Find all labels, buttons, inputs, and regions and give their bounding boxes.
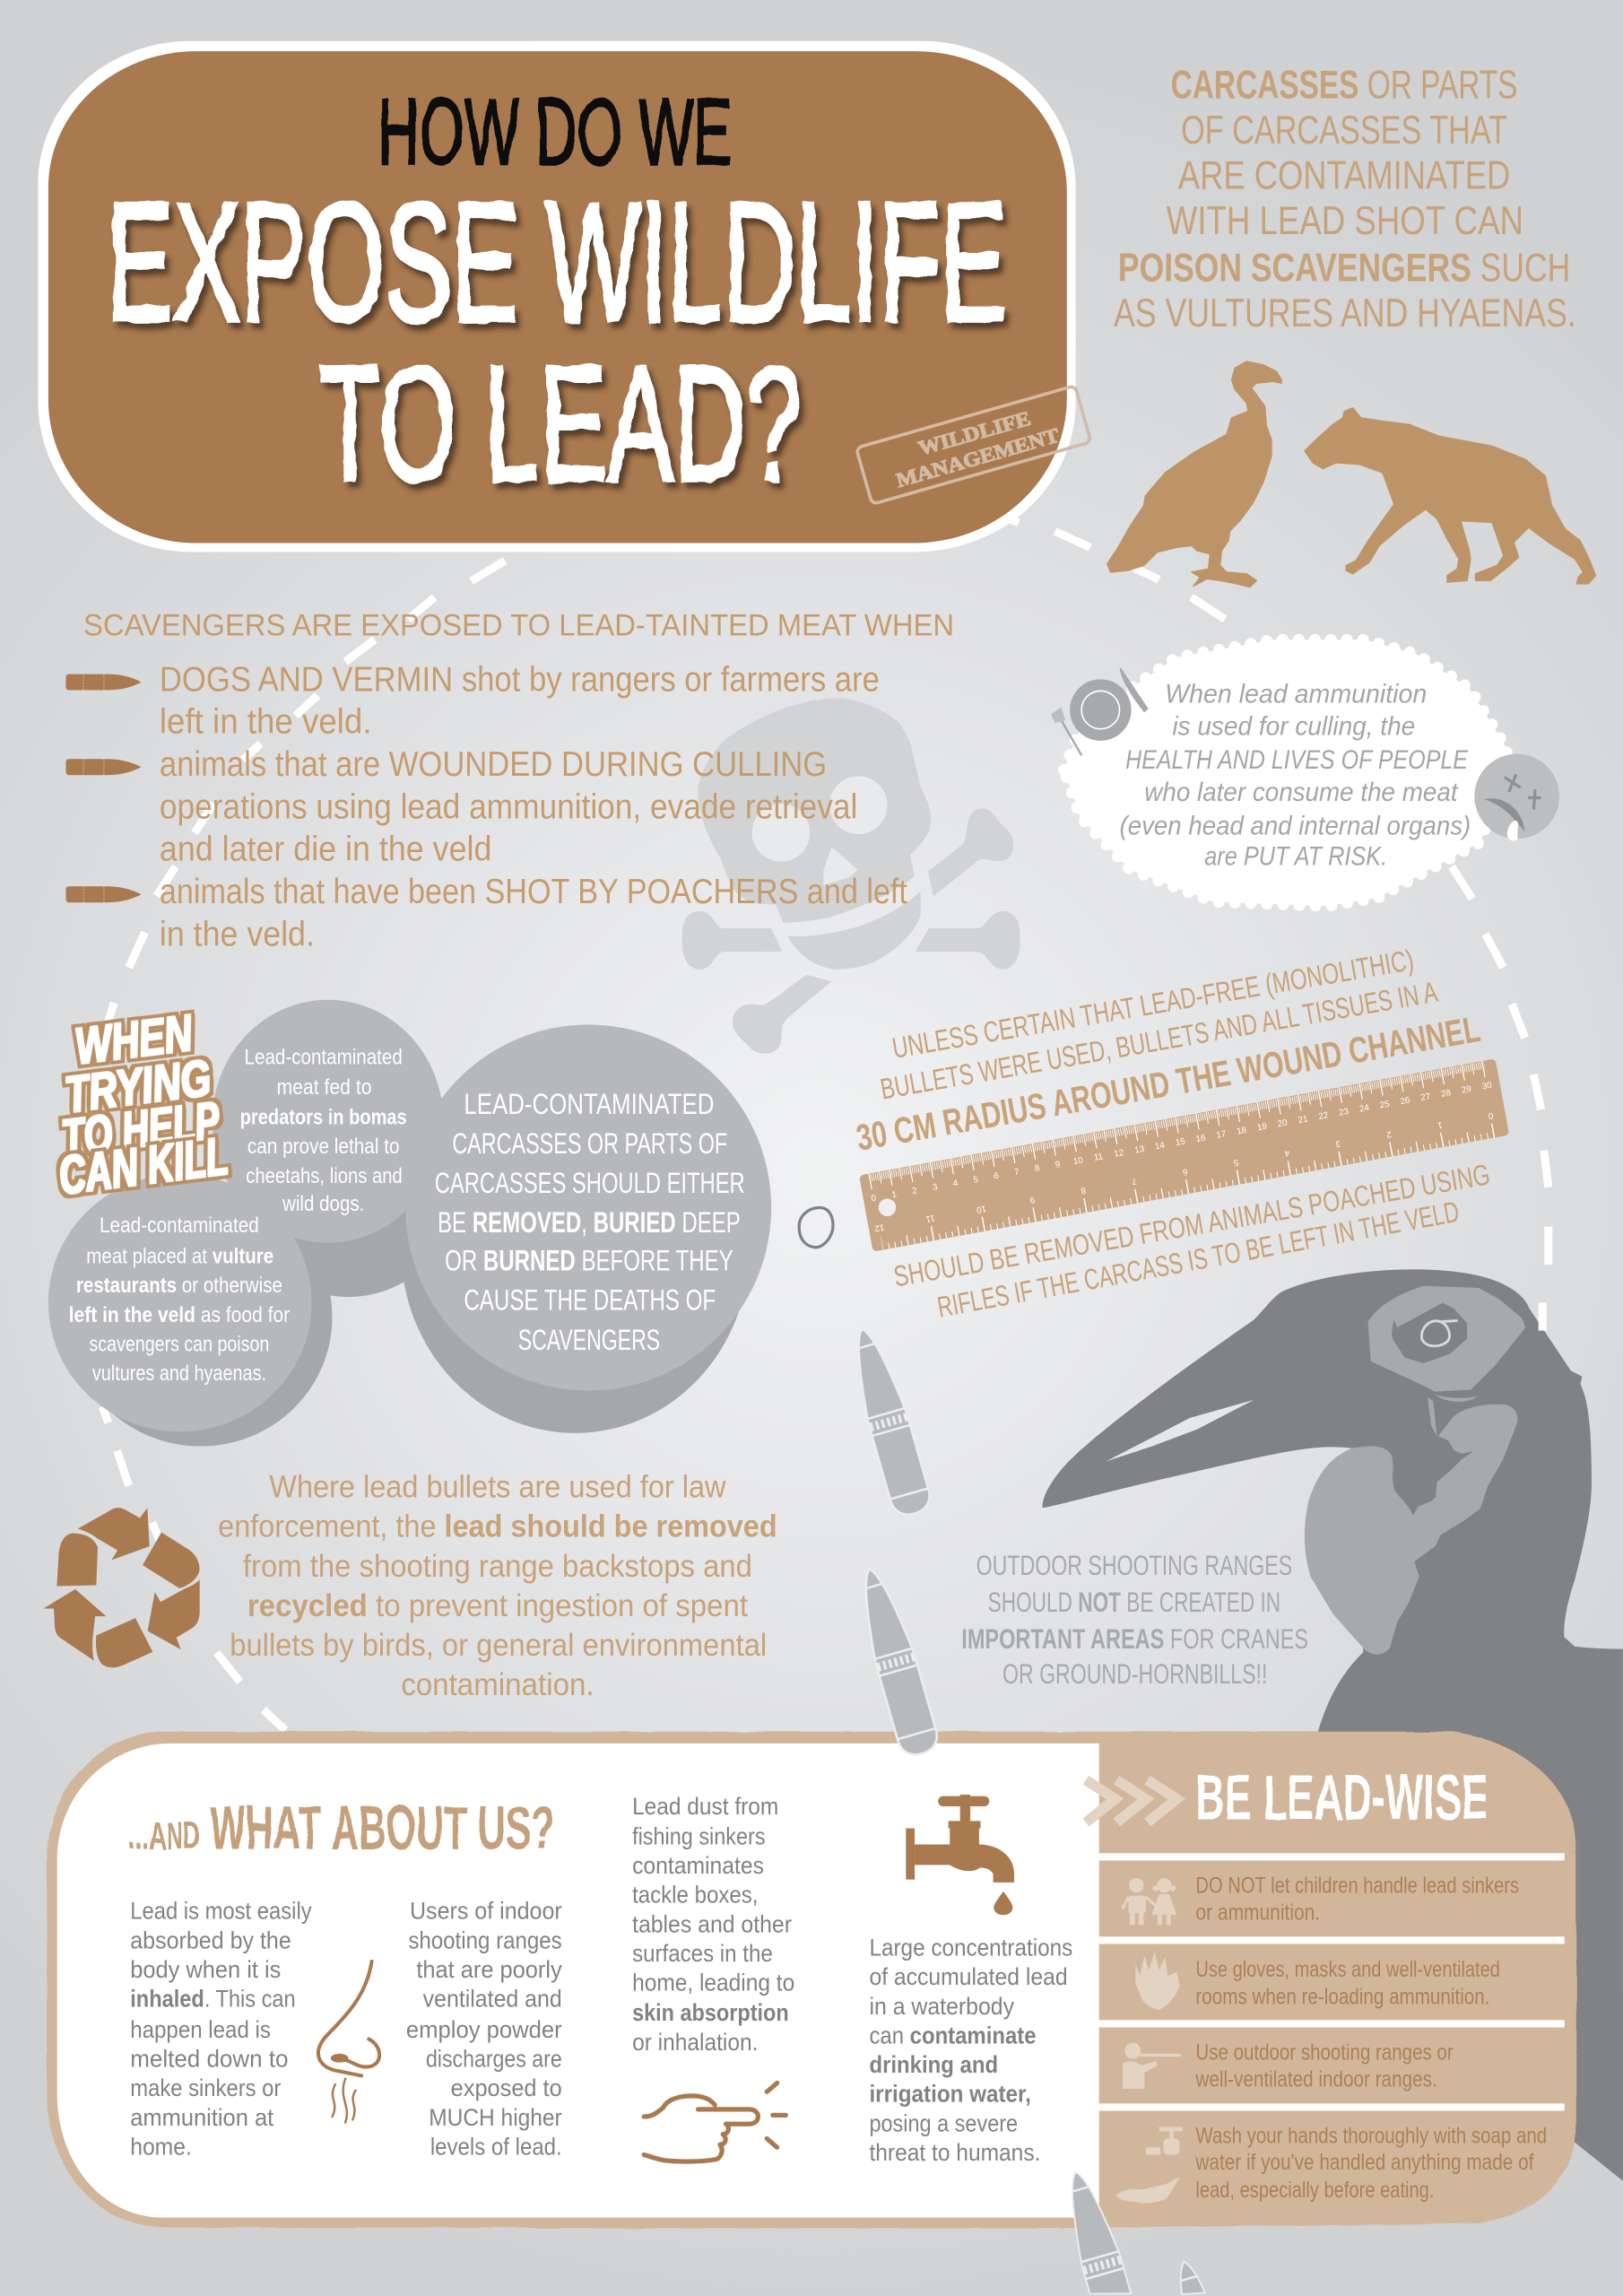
ruler: 12 — [873, 1222, 885, 1233]
ruler: 27 — [1420, 1091, 1431, 1103]
text: carcasses: WITH LEAD SHOT CAN — [1167, 199, 1523, 243]
ruler: 9 — [1028, 1195, 1036, 1205]
icon: bullet 3 — [1056, 2167, 1131, 2296]
heading: expose wildlife: EXPOSE WILDLIFE — [107, 168, 1007, 357]
ruler: 0 — [1487, 1110, 1494, 1121]
ruler: 7 — [1013, 1167, 1020, 1178]
text: lead dust column: contaminates — [632, 1852, 764, 1879]
ruler: 12 — [1114, 1148, 1124, 1160]
icon: small ring — [799, 1208, 833, 1248]
circles: when trying to help — [48, 1000, 771, 1447]
callout: health cloud — [1051, 639, 1559, 906]
text: lead dust column: surfaces in the — [632, 1940, 773, 1967]
ruler: 4 — [952, 1178, 959, 1189]
tip list text: Wash your hands thoroughly with soap and — [1195, 2123, 1547, 2148]
text: indoor ranges column: shooting ranges — [408, 1926, 562, 1953]
tip list text — [1195, 1873, 1547, 2203]
icon: shooter — [1123, 2043, 1181, 2089]
text: health warning: is used for culling, the — [1172, 711, 1415, 741]
ruler: 6 — [1181, 1166, 1188, 1177]
stamp: wildlife management: MANAGEMENT — [894, 424, 1062, 491]
bullet list: operations using lead ammunition, evade retrieval — [160, 787, 857, 826]
ruler: 2 — [1385, 1129, 1393, 1139]
ruler: 14 — [1154, 1141, 1166, 1152]
ruler: 1 — [1436, 1119, 1443, 1130]
heading: when trying to help can kill: TO HELP — [58, 1091, 223, 1168]
text: bomas circle: can prove lethal to — [247, 1135, 400, 1159]
heading: and what about us — [129, 1793, 555, 1862]
stamp: wildlife management — [856, 386, 1091, 504]
text: carcasses: ARE CONTAMINATED — [1178, 154, 1510, 198]
text: carcasses: CARCASSES OR PARTS — [1171, 63, 1517, 107]
ruler: 13 — [1133, 1144, 1146, 1156]
text: health warning: (even head and internal organs) — [1120, 811, 1471, 840]
bullet list: in the veld. — [160, 915, 315, 953]
ruler: 11 — [1093, 1152, 1104, 1163]
ruler: 9 — [1055, 1160, 1061, 1170]
text: waterbody column: Large concentrations — [869, 1935, 1072, 1961]
heading: when trying to help can kill: TRYING — [62, 1049, 214, 1124]
icon: bullet 1 — [843, 1324, 933, 1519]
text: remove carcasses circle: SCAVENGERS — [518, 1323, 660, 1356]
hornbill illustration — [1043, 1269, 1623, 2181]
text: law enforcement: Where lead bullets are used for law — [269, 1470, 726, 1505]
text: vulture restaurants circle: Lead-contaminated — [100, 1214, 259, 1238]
text: waterbody column: drinking and — [869, 2051, 998, 2078]
text: lead dust column: skin absorption — [632, 1999, 789, 2026]
heading: and what about us: WHAT ABOUT US? — [209, 1793, 555, 1862]
text: inhaled column — [130, 1898, 312, 2160]
icon: hyena — [1305, 408, 1595, 584]
icon: vulture — [1107, 361, 1281, 587]
text: bomas circle — [240, 1047, 407, 1216]
text: law enforcement: from the shooting range backstops and — [243, 1549, 752, 1584]
ruler — [859, 1058, 1509, 1252]
text: bomas circle: wild dogs. — [282, 1193, 364, 1216]
ruler: 0 — [871, 1194, 878, 1204]
text: health warning: HEALTH AND LIVES OF PEOPLE — [1125, 745, 1468, 775]
text: indoor ranges column: Users of indoor — [410, 1898, 562, 1925]
ruler: 24 — [1358, 1103, 1370, 1115]
heading: when trying to help can kill: CAN KILL — [56, 1125, 231, 1206]
text: health warning — [1120, 679, 1471, 872]
text: inhaled column: inhaled. This can — [130, 1986, 296, 2013]
ruler: 11 — [924, 1213, 935, 1224]
ruler: 6 — [994, 1170, 1000, 1181]
text: lead dust column: tackle boxes, — [632, 1882, 758, 1909]
title panel — [38, 41, 1091, 552]
text: carcasses — [1114, 63, 1576, 335]
text: indoor ranges column: ventilated and — [423, 1986, 562, 2013]
ruler: 29 — [1461, 1084, 1472, 1096]
ruler: 19 — [1256, 1122, 1268, 1133]
text: inhaled column: Lead is most easily — [130, 1898, 312, 1925]
ruler: 3 — [932, 1182, 939, 1193]
ruler: 22 — [1318, 1110, 1329, 1122]
text: waterbody column: posing a severe — [869, 2109, 1018, 2136]
text: indoor ranges column: discharges are — [426, 2046, 562, 2073]
ruler: 5 — [973, 1175, 980, 1186]
panel: be lead-wise — [1086, 1762, 1565, 2203]
text: indoor ranges column — [406, 1898, 562, 2160]
ruler: 30 — [1481, 1081, 1493, 1091]
bullet list: animals that have been SHOT BY POACHERS and left — [160, 873, 907, 911]
text: bomas circle: cheetahs, lions and — [246, 1165, 403, 1188]
text: lead dust column: or inhalation. — [632, 2029, 758, 2056]
text: inhaled column: melted down to — [130, 2046, 289, 2073]
text: waterbody column: threat to humans. — [869, 2139, 1040, 2166]
text: inhaled column: make sinkers or — [130, 2074, 281, 2101]
heading: how do we: HOW DO WE — [378, 80, 732, 185]
ruler: 15 — [1175, 1136, 1186, 1148]
icon: dripping tap — [906, 1795, 1014, 1915]
icon: children — [1123, 1878, 1176, 1925]
text: outdoor shooting ranges: SHOULD NOT BE CREATED IN — [988, 1586, 1280, 1618]
text: indoor ranges column: MUCH higher — [429, 2104, 562, 2131]
icon: bullet point 2 — [65, 759, 141, 775]
text: indoor ranges column: that are poorly — [416, 1956, 562, 1983]
ruler: 26 — [1400, 1095, 1411, 1107]
heading: and what about us: ...AND — [129, 1814, 201, 1857]
ruler: 5 — [1232, 1157, 1239, 1168]
tip list text: lead, especially before eating. — [1195, 2178, 1434, 2203]
text: health warning: are PUT AT RISK. — [1204, 842, 1387, 872]
heading: to lead: TO LEAD? — [319, 332, 802, 515]
bullet list — [65, 660, 907, 953]
text: remove carcasses circle: CARCASSES OR PARTS OF — [452, 1126, 727, 1160]
text: vulture restaurants circle — [69, 1214, 290, 1386]
heading: when trying to help can kill: WHEN — [72, 1004, 196, 1075]
ruler: 4 — [1283, 1147, 1290, 1158]
ruler: 23 — [1338, 1107, 1350, 1118]
text: waterbody column: irrigation water, — [869, 2081, 1031, 2108]
text: waterbody column — [869, 1935, 1072, 2166]
text: health warning: When lead ammunition — [1165, 679, 1427, 709]
text: waterbody column: in a waterbody — [869, 1993, 1015, 2020]
ruler: 10 — [1072, 1155, 1084, 1167]
text: lead dust column: fishing sinkers — [632, 1822, 766, 1849]
icon: pointing finger — [644, 2083, 785, 2161]
text: carcasses: POISON SCAVENGERS SUCH — [1118, 246, 1570, 290]
icon: nose — [318, 1961, 379, 2123]
icon: bullet 2 — [850, 1564, 942, 1759]
text: outdoor shooting ranges: OR GROUND-HORNBILLS!! — [1002, 1657, 1267, 1690]
text: vulture restaurants circle: scavengers can poison — [90, 1333, 269, 1356]
icon: bullet 4 — [1174, 2258, 1205, 2296]
tip list text: Use gloves, masks and well-ventilated — [1195, 1957, 1500, 1982]
text: lead dust column: tables and other — [632, 1910, 792, 1937]
text: health warning: who later consume the meat — [1144, 778, 1459, 807]
ruler: 2 — [911, 1186, 918, 1196]
text: law enforcement: bullets by birds, or general environmental — [230, 1628, 767, 1663]
ruler: 28 — [1440, 1088, 1453, 1100]
ruler: 8 — [1034, 1163, 1041, 1174]
bullet list: left in the veld. — [160, 703, 372, 742]
text: remove carcasses circle: BE REMOVED, BURIED DEEP — [438, 1205, 741, 1239]
icon: gloves — [1135, 1952, 1179, 2010]
ruler: 8 — [1080, 1185, 1087, 1196]
icon: bullet point 3 — [65, 886, 141, 902]
text: carcasses: OF CARCASSES THAT — [1181, 109, 1507, 152]
tip list text: or ammunition. — [1195, 1900, 1320, 1926]
bullet list: animals that are WOUNDED DURING CULLING — [160, 745, 827, 784]
ruler: 21 — [1298, 1114, 1308, 1126]
icon: sick face — [1474, 754, 1559, 840]
tip list text: Use outdoor shooting ranges or — [1195, 2039, 1454, 2065]
text: waterbody column: of accumulated lead — [869, 1963, 1068, 1990]
ruler: 17 — [1216, 1129, 1227, 1141]
text: inhaled column: home. — [130, 2133, 192, 2160]
text: remove carcasses circle: CAUSE THE DEATHS OF — [464, 1283, 716, 1317]
text: outdoor shooting ranges — [961, 1549, 1308, 1690]
text: lead dust column: home, leading to — [632, 1970, 794, 1996]
bullet list: DOGS AND VERMIN shot by rangers or farmers are — [160, 660, 880, 699]
text: bomas circle: predators in bomas — [240, 1106, 407, 1129]
heading: when trying to help can kill — [56, 1004, 231, 1206]
text: law enforcement: contamination. — [401, 1667, 595, 1702]
text: remove carcasses circle: OR BURNED BEFORE THEY — [445, 1244, 733, 1277]
ruler: 18 — [1236, 1126, 1248, 1137]
text: indoor ranges column: exposed to — [451, 2074, 562, 2101]
icon: bullet point 1 — [65, 674, 141, 691]
text: inhaled column: ammunition at — [130, 2104, 274, 2131]
text: remove carcasses circle: LEAD-CONTAMINATED — [464, 1087, 714, 1120]
text: indoor ranges column: levels of lead. — [430, 2133, 562, 2160]
ruler: 1 — [891, 1189, 898, 1200]
tip list text: DO NOT let children handle lead sinkers — [1195, 1873, 1519, 1898]
ruler: 20 — [1277, 1118, 1289, 1129]
text: law enforcement: recycled to prevent ingestion of spent — [247, 1588, 748, 1623]
text: outdoor shooting ranges: OUTDOOR SHOOTING RANGES — [976, 1549, 1292, 1581]
text: law enforcement — [218, 1470, 777, 1702]
text: remove carcasses circle — [435, 1087, 745, 1356]
icon: chevrons — [1086, 1780, 1176, 1822]
icon: recycle arrows — [43, 1508, 200, 1667]
dashed trail line — [102, 518, 1549, 1730]
text: law enforcement: enforcement, the lead should be removed — [218, 1509, 777, 1544]
text: vulture restaurants circle: left in the veld as food for — [69, 1304, 290, 1327]
bullet list: and later die in the veld — [160, 831, 491, 869]
ruler: 16 — [1195, 1133, 1207, 1144]
text: vulture restaurants circle: vultures and hyaenas. — [92, 1362, 266, 1386]
text: bomas circle: Lead-contaminated — [245, 1047, 403, 1070]
text: vulture restaurants circle: restaurants or otherwise — [76, 1274, 282, 1298]
text: indoor ranges column: employ powder — [406, 2016, 562, 2043]
tip list text: rooms when re-loading ammunition. — [1195, 1984, 1489, 2009]
text: outdoor shooting ranges: IMPORTANT AREAS FOR CRANES — [961, 1622, 1308, 1655]
text: wound channel upper: UNLESS CERTAIN THAT LEAD-FREE (MONOLITHIC) — [890, 943, 1416, 1065]
text: remove carcasses circle: CARCASSES SHOULD EITHER — [435, 1166, 745, 1199]
text: lead dust column: Lead dust from — [632, 1793, 778, 1820]
stamp: wildlife management: WILDLIFE — [916, 407, 1033, 459]
text: inhaled column: body when it is — [130, 1956, 281, 1983]
panel: and what about us — [47, 1732, 1576, 2228]
tip list text: water if you've handled anything made of — [1195, 2150, 1534, 2175]
text: bomas circle: meat fed to — [276, 1076, 372, 1100]
icon: skull and crossbones — [682, 698, 1020, 1054]
text: vulture restaurants circle: meat placed at vulture — [86, 1246, 273, 1269]
heading: scavengers: SCAVENGERS ARE EXPOSED TO LEAD-TAINTED MEAT WHEN — [83, 608, 954, 642]
ruler: 25 — [1379, 1099, 1391, 1110]
text: waterbody column: can contaminate — [869, 2022, 1037, 2048]
text: lead dust column — [632, 1793, 794, 2056]
icon: plate and cutlery — [1051, 668, 1148, 755]
ruler: 7 — [1131, 1176, 1137, 1186]
ruler: 3 — [1334, 1138, 1341, 1149]
text: inhaled column: happen lead is — [130, 2016, 271, 2043]
tip list text: well-ventilated indoor ranges. — [1195, 2067, 1437, 2092]
text: inhaled column: absorbed by the — [130, 1926, 291, 1953]
icon: washing hands — [1115, 2126, 1183, 2203]
ruler: 10 — [975, 1203, 987, 1214]
